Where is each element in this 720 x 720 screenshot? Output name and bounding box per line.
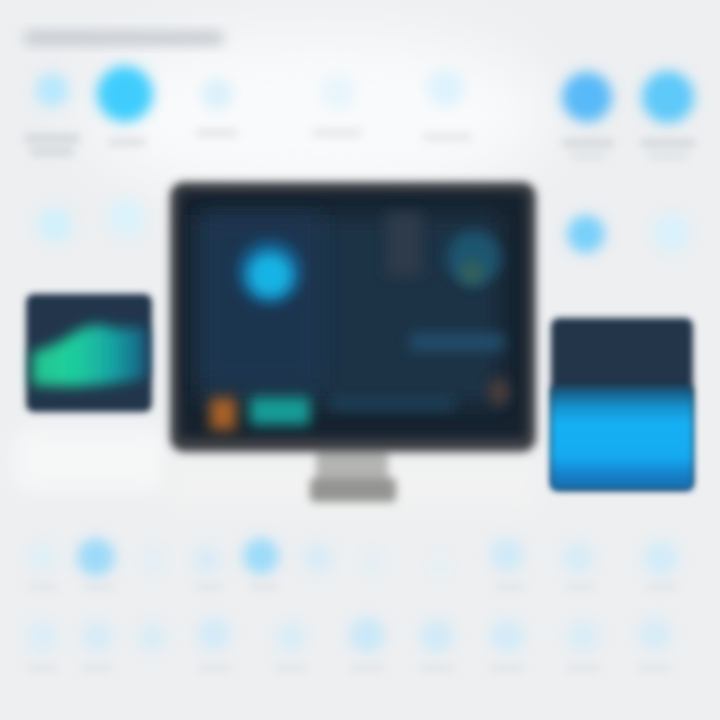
screen tint	[200, 215, 500, 405]
icon: circle 4	[320, 74, 356, 110]
title	[24, 31, 224, 45]
icon: circle 6	[562, 72, 612, 122]
icon: left circle 2	[107, 199, 145, 237]
green area chart	[32, 325, 146, 386]
icon: right circle 1	[567, 215, 605, 253]
icon: circle 2	[97, 66, 153, 122]
tablet body	[26, 294, 152, 412]
monitor bezel	[170, 182, 536, 452]
captions row	[24, 129, 696, 159]
screen orange dot	[489, 378, 509, 406]
icon: circle 5	[427, 69, 465, 107]
screen teal block	[250, 397, 310, 425]
blue panel	[551, 386, 693, 490]
screen column shade	[386, 212, 422, 276]
icon: right circle 2	[652, 214, 690, 252]
left tablet	[26, 294, 152, 412]
middle side icons	[37, 199, 690, 253]
bottom icon grid row 1	[27, 538, 679, 577]
tablet body	[551, 318, 693, 490]
bottom icon grid row 2	[25, 617, 672, 654]
screen blue glow circle	[238, 240, 302, 304]
screen orange block	[210, 398, 236, 430]
icon: circle 3	[201, 78, 233, 110]
icon: circle 1	[35, 73, 69, 107]
bottom captions	[28, 584, 677, 671]
monitor	[170, 182, 536, 452]
screen bottom bar	[330, 396, 455, 410]
screen blue bar	[410, 333, 504, 351]
monitor stand	[310, 448, 396, 502]
screen left tint	[200, 215, 320, 385]
right tablet	[551, 318, 693, 490]
icon: circle 7	[642, 71, 694, 123]
top icon row	[24, 66, 696, 159]
icon: left circle 1	[37, 207, 73, 243]
screen donut chart	[447, 231, 501, 285]
monitor screen	[180, 192, 526, 438]
